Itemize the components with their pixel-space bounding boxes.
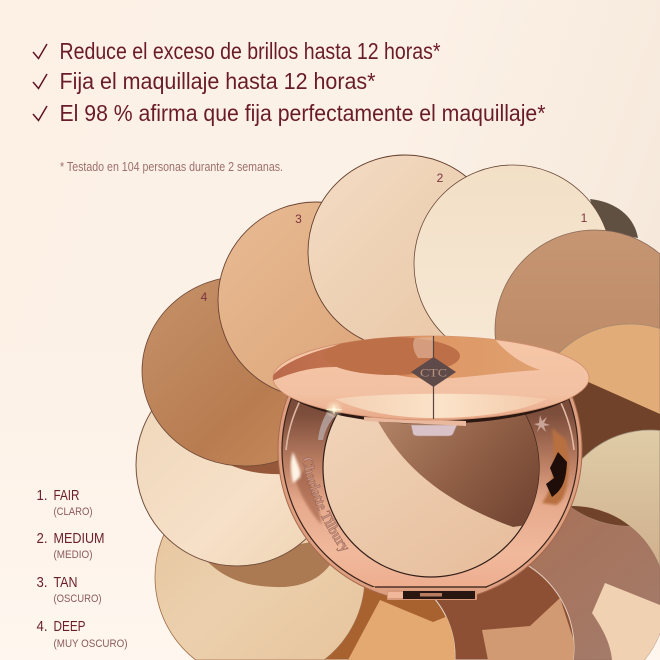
- disc 3: [218, 202, 414, 398]
- disc 4: 4: [201, 290, 208, 304]
- bullet list of benefits: [33, 38, 546, 126]
- legend: fair: (CLARO): [54, 506, 92, 518]
- disc 6: [154, 534, 365, 660]
- footnote: * Testado en 104 personas durante 2 semanas.: [60, 160, 283, 174]
- disc 2: 2: [437, 171, 444, 185]
- legend: tan: (OSCURO): [54, 593, 102, 605]
- compact base ring: [278, 396, 582, 596]
- disc 4: [142, 276, 348, 466]
- disc 1: [414, 165, 612, 363]
- legend: fair: [36, 487, 92, 518]
- benefit 2: Fija el maquillaje hasta 12 horas*: [60, 68, 376, 94]
- brand diamond logo: [411, 357, 456, 387]
- legend: tan: TAN: [54, 574, 78, 591]
- legend: deep: (MUY OSCURO): [54, 638, 128, 650]
- legend: fair: 1.: [36, 487, 48, 504]
- compact base ring: Charlotte Tilbury: [302, 457, 348, 552]
- disc 8: [436, 566, 574, 660]
- benefit 3: El 98 % afirma que fija perfectamente el maquillaje*: [60, 100, 546, 126]
- disc 1: 1: [581, 211, 588, 225]
- shadow behind disc 1: [590, 199, 638, 238]
- legend: fair: FAIR: [54, 487, 80, 504]
- shade discs fan: [136, 155, 660, 660]
- disc 5: [136, 411, 306, 566]
- disc 10: [572, 430, 660, 567]
- hinge bar under lid: [364, 417, 466, 426]
- legend: deep: 4.: [36, 618, 48, 635]
- benefit 1: Reduce el exceso de brillos hasta 12 horas*: [60, 38, 441, 64]
- ring reflections: [291, 452, 301, 483]
- powder compact: [272, 336, 590, 600]
- legend: medium: [36, 530, 104, 561]
- legend: medium: MEDIUM: [54, 530, 104, 547]
- legend: tan: 3.: [36, 574, 48, 591]
- disc 12: [495, 230, 660, 430]
- disc 7: [325, 588, 456, 660]
- embossed brand name: [302, 458, 345, 556]
- lid underside shadow: [279, 338, 583, 424]
- disc 3: 3: [295, 212, 302, 226]
- disc 2: [308, 155, 502, 349]
- disc 9: [529, 508, 660, 660]
- mirror clasp tab: [411, 425, 457, 436]
- legend: deep: DEEP: [54, 618, 86, 635]
- compact lid: [270, 334, 589, 420]
- disc 11: [558, 324, 660, 526]
- shade legend: [36, 487, 128, 650]
- lid reflection band: [270, 334, 540, 382]
- brand diamond logo: CTC: [420, 366, 447, 380]
- sparkle: [325, 400, 343, 418]
- powder pan: [318, 412, 540, 578]
- legend: tan: [36, 574, 102, 605]
- legend: medium: 2.: [36, 530, 48, 547]
- legend: deep: [36, 618, 128, 650]
- legend: medium: (MEDIO): [54, 549, 92, 561]
- hinge clasp: [387, 590, 477, 600]
